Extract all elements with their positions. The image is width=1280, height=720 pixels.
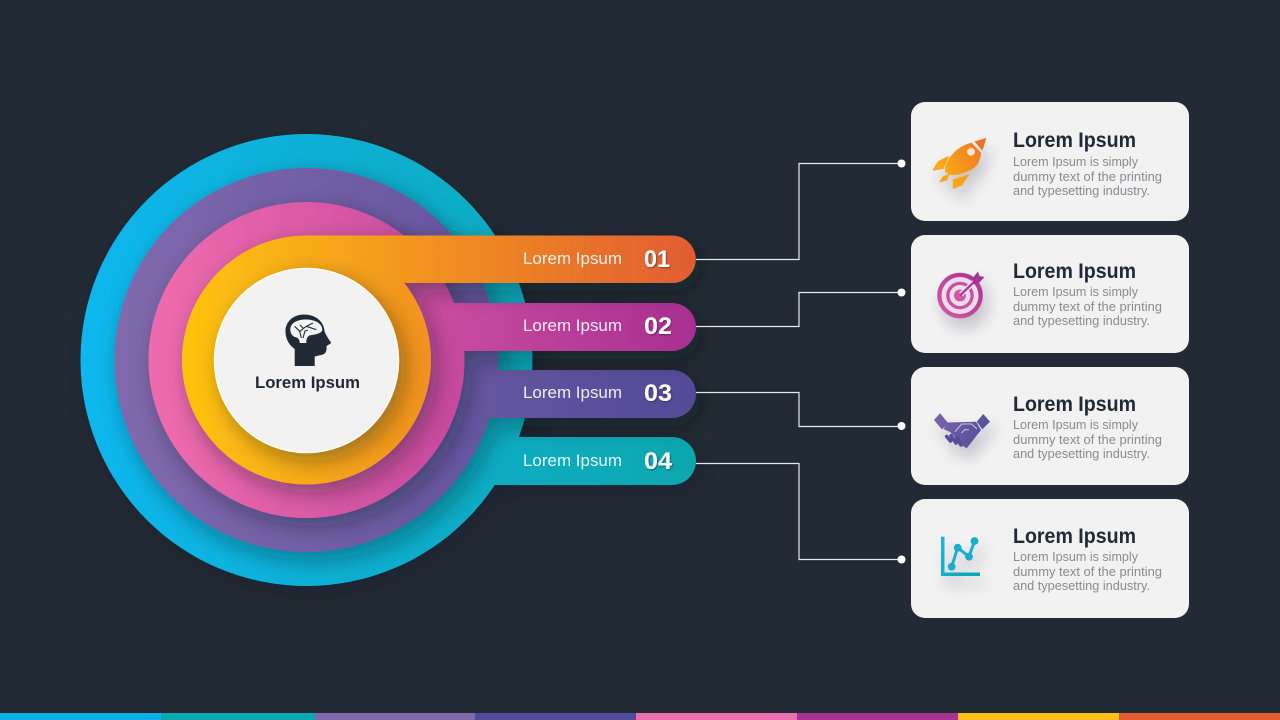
label 02: Lorem Ipsum — [523, 316, 622, 335]
card 1 text: and typesetting industry. — [1013, 184, 1150, 198]
card 4 — [911, 499, 1189, 618]
card 3 text: dummy text of the printing — [1013, 433, 1162, 447]
card 4 title: Lorem Ipsum — [1013, 525, 1136, 548]
card 4 text — [1013, 550, 1162, 593]
ring and bar 04: blue to teal — [80, 134, 696, 586]
card 1 text: Lorem Ipsum is simply — [1013, 155, 1139, 169]
card 1 text: dummy text of the printing — [1013, 170, 1162, 184]
ring and bar 01: yellow to orange — [182, 236, 696, 484]
card 1 text — [1013, 155, 1162, 198]
card 3 text — [1013, 418, 1162, 461]
card 4 text: Lorem Ipsum is simply — [1013, 550, 1139, 564]
connector 03 — [696, 392, 901, 426]
card 2 text: Lorem Ipsum is simply — [1013, 285, 1139, 299]
connector 01 — [696, 164, 901, 260]
icon: line chart — [941, 537, 980, 576]
icon: rocket — [933, 138, 986, 188]
icon: head with brain — [286, 314, 331, 366]
card 1 — [911, 102, 1189, 221]
number 03: 03 — [644, 380, 672, 407]
centre label: Lorem Ipsum — [255, 373, 360, 392]
connector 02 — [696, 292, 901, 326]
card 2 title: Lorem Ipsum — [1013, 260, 1136, 283]
bottom colour strip — [0, 713, 1280, 720]
card 3 text: Lorem Ipsum is simply — [1013, 418, 1139, 432]
card 2 text: and typesetting industry. — [1013, 314, 1150, 328]
card 3 text: and typesetting industry. — [1013, 447, 1150, 461]
card 4 text: and typesetting industry. — [1013, 579, 1150, 593]
label 04: Lorem Ipsum — [523, 451, 622, 470]
number 02: 02 — [644, 313, 672, 340]
connectors — [696, 164, 901, 560]
number 01: 01 — [644, 246, 670, 273]
label 01: Lorem Ipsum — [523, 249, 622, 268]
card 3 title: Lorem Ipsum — [1013, 393, 1136, 416]
card 2 — [911, 235, 1189, 353]
label 03: Lorem Ipsum — [523, 383, 622, 402]
concentric rings diagram — [80, 134, 696, 586]
card 1 title: Lorem Ipsum — [1013, 129, 1136, 152]
number 04: 04 — [644, 448, 673, 475]
connector 04 — [696, 464, 901, 560]
card 4 text: dummy text of the printing — [1013, 565, 1162, 579]
card 3 — [911, 367, 1189, 485]
icon: target with arrow — [937, 272, 984, 318]
centre circle — [214, 268, 398, 452]
ring and bar 03: purple — [114, 168, 696, 552]
card 2 text: dummy text of the printing — [1013, 300, 1162, 314]
connector dots — [898, 160, 906, 564]
card 2 text — [1013, 285, 1162, 328]
icon: handshake — [934, 413, 990, 448]
ring and bar 02: pink to magenta — [148, 202, 696, 518]
bar labels — [523, 246, 673, 475]
